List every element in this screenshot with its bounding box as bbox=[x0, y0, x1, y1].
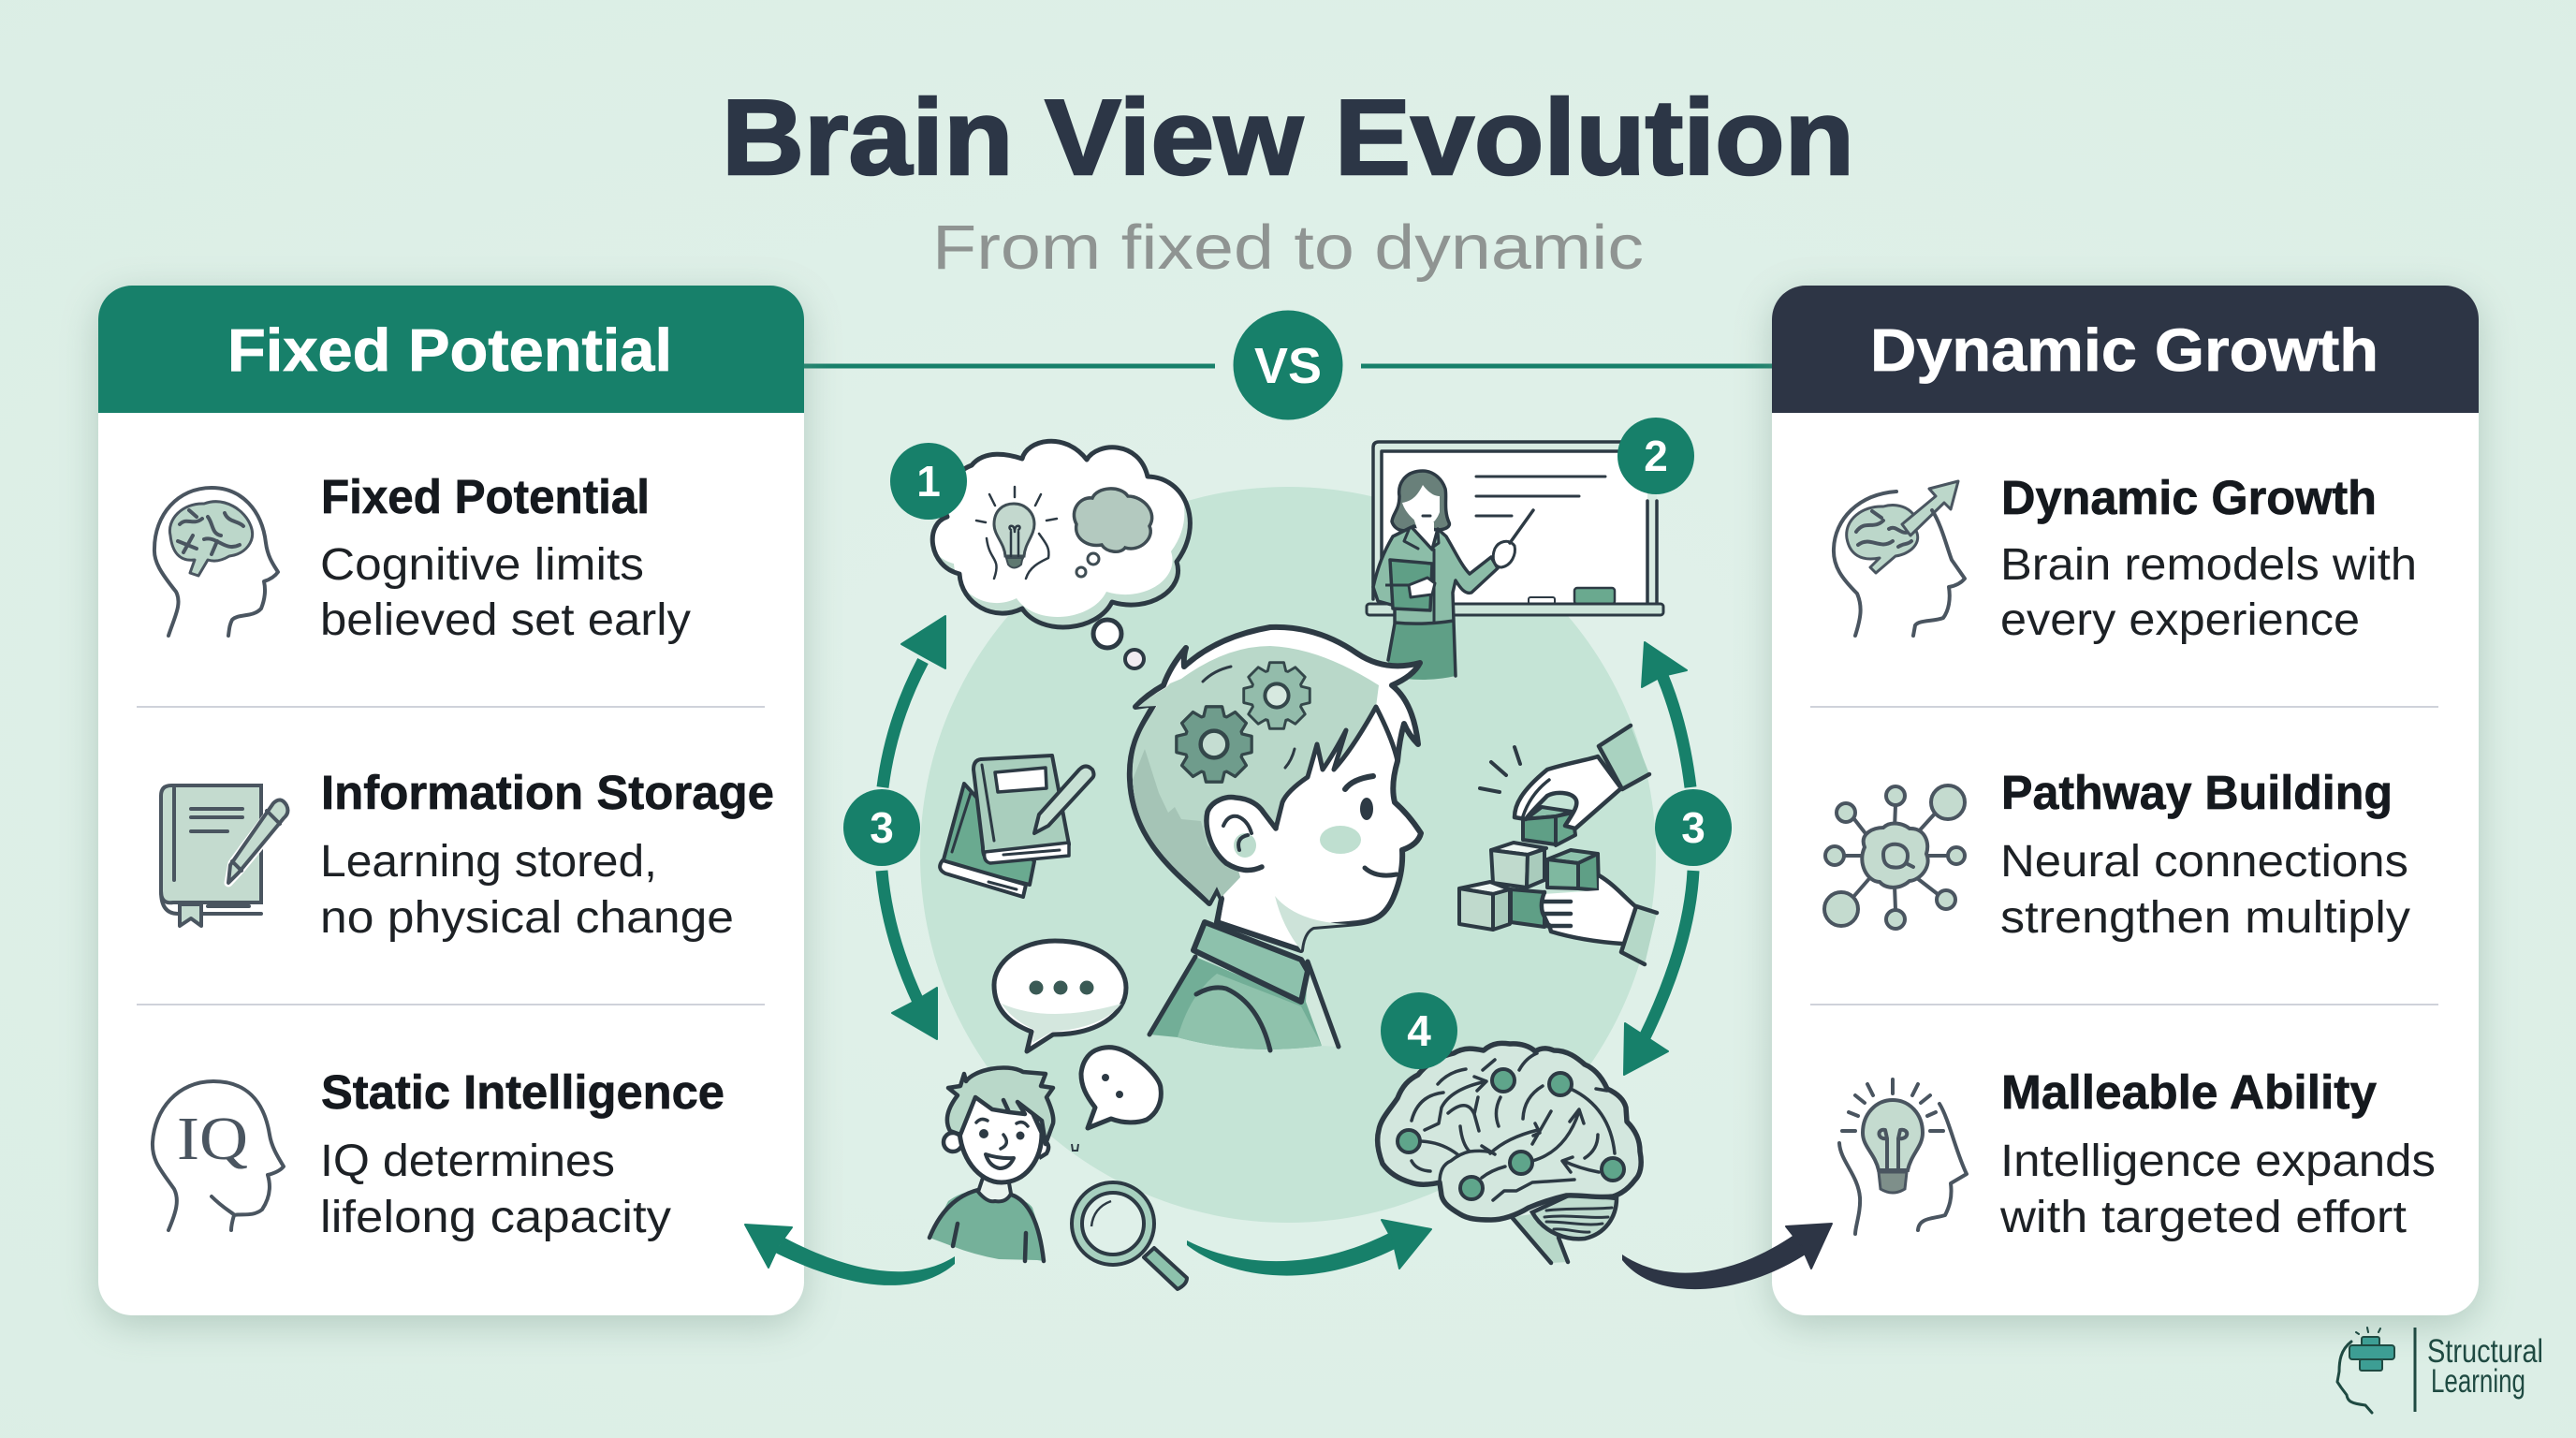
text: static intelligence: lifelong capacity bbox=[320, 1193, 671, 1242]
logo: Structural Learning bbox=[2337, 1328, 2543, 1413]
illustration: brain with pathways bbox=[1378, 1043, 1641, 1263]
icon: bulb in head bbox=[976, 487, 1057, 579]
arrow: to right panel bbox=[1622, 1224, 1832, 1289]
icon: book and pencil bbox=[161, 785, 288, 926]
text: dynamic growth bbox=[2000, 471, 2417, 645]
icon: head with IQ bbox=[153, 1081, 284, 1230]
icon: head with growing brain bbox=[1834, 481, 1965, 636]
text: malleable ability: Malleable Ability bbox=[2001, 1065, 2378, 1119]
text: static intelligence: Static Intelligence bbox=[321, 1065, 724, 1119]
text: information storage bbox=[320, 766, 774, 943]
illustration: boy with gears bbox=[1130, 627, 1421, 1050]
arrow: to left panel bbox=[745, 1225, 955, 1285]
badge 3 left: 3 bbox=[870, 803, 894, 852]
front notebook bbox=[973, 756, 1069, 863]
blocks bbox=[1459, 807, 1599, 930]
text: malleable ability: with targeted effort bbox=[1999, 1193, 2407, 1242]
gear small bbox=[1244, 663, 1310, 728]
panel header bbox=[98, 286, 804, 413]
neck shading bbox=[1275, 896, 1348, 950]
text: static intelligence: IQ determines bbox=[320, 1137, 615, 1186]
icon: neural network bbox=[1824, 785, 1965, 929]
panel: fixed potential bbox=[98, 286, 804, 1325]
text: pathway building bbox=[2000, 766, 2410, 943]
panel header bbox=[1772, 286, 2479, 413]
badge 2: 2 bbox=[1644, 432, 1668, 480]
text: fixed potential: Cognitive limits bbox=[320, 540, 644, 590]
panel: dynamic growth bbox=[1772, 286, 2479, 1325]
text: pathway building: Pathway Building bbox=[2001, 766, 2393, 819]
upper cuff bbox=[1598, 726, 1649, 789]
text: information storage: no physical change bbox=[320, 893, 734, 943]
pencil bbox=[1034, 766, 1093, 833]
subtitle: From fixed to dynamic bbox=[932, 213, 1644, 283]
icon: magnifying glass bbox=[1072, 1182, 1187, 1289]
badge 3 right bbox=[1655, 789, 1732, 866]
ear bbox=[1207, 798, 1276, 870]
brain outline bbox=[1378, 1043, 1641, 1220]
icon: head with light bulb bbox=[1839, 1079, 1967, 1234]
illustration: teacher at whiteboard bbox=[1367, 442, 1663, 680]
brain folds and pathways bbox=[1412, 1053, 1615, 1200]
text: pathway building: Neural connections bbox=[2000, 837, 2408, 887]
illustration: books and pencil bbox=[940, 756, 1093, 897]
VS connector bbox=[804, 311, 1772, 419]
badge 1 bbox=[890, 443, 967, 520]
hair shadow bbox=[1133, 749, 1240, 901]
badge 3 right: 3 bbox=[1681, 803, 1705, 852]
badge 4: 4 bbox=[1407, 1006, 1431, 1055]
lower hand bbox=[1543, 875, 1635, 944]
title: Brain View Evolution bbox=[722, 79, 1854, 198]
text: fixed potential bbox=[320, 470, 691, 645]
badge 2 bbox=[1617, 418, 1694, 494]
lower cuff bbox=[1621, 906, 1657, 964]
icon: head with IQ: IQ bbox=[177, 1105, 248, 1173]
upper hand bbox=[1515, 756, 1621, 829]
panel header: Dynamic Growth bbox=[1870, 316, 2378, 384]
arrow: right cycle up bbox=[1642, 642, 1690, 787]
text: dynamic growth: Brain remodels with bbox=[2000, 540, 2417, 590]
gear large bbox=[1177, 707, 1251, 782]
cerebellum bbox=[1532, 1194, 1617, 1239]
icon: head with brain bbox=[154, 488, 278, 636]
badge 1: 1 bbox=[916, 457, 941, 506]
teacher figure bbox=[1373, 471, 1533, 680]
arrow: right cycle down bbox=[1624, 871, 1693, 1075]
text: fixed potential: believed set early bbox=[320, 595, 691, 645]
logo: Structural Learning: Structural bbox=[2427, 1333, 2543, 1370]
thought bubbles bbox=[1093, 620, 1144, 668]
text: malleable ability bbox=[1999, 1065, 2436, 1242]
text: dynamic growth: every experience bbox=[2000, 595, 2360, 645]
logo: Structural Learning: Learning bbox=[2431, 1363, 2525, 1400]
central circle backdrop bbox=[920, 487, 1656, 1223]
text: dynamic growth: Dynamic Growth bbox=[2001, 471, 2377, 524]
spark lines bbox=[1480, 747, 1520, 792]
text: information storage: Information Storage bbox=[321, 766, 774, 819]
text: malleable ability: Intelligence expands bbox=[2000, 1137, 2436, 1186]
illustration: speech bubbles bbox=[994, 941, 1161, 1151]
badge 4 bbox=[1381, 992, 1457, 1069]
text: static intelligence bbox=[320, 1065, 724, 1242]
panel header: Fixed Potential bbox=[227, 316, 672, 384]
illustration: small boy bbox=[929, 1067, 1053, 1261]
illustration: blocks and hands bbox=[1459, 726, 1657, 964]
VS connector: VS bbox=[1254, 338, 1322, 394]
whiteboard bbox=[1367, 442, 1663, 615]
arrow: to brain bbox=[1187, 1220, 1431, 1276]
illustration: thought cloud bbox=[927, 431, 1190, 627]
pathway nodes bbox=[1398, 1069, 1624, 1199]
brain stem bbox=[1512, 1212, 1568, 1263]
text: pathway building: strengthen multiply bbox=[2000, 893, 2410, 943]
logo icon bbox=[2337, 1328, 2394, 1413]
back book bbox=[940, 784, 1034, 897]
icon: small cloud bbox=[1074, 489, 1152, 551]
face details bbox=[1320, 776, 1397, 875]
badge 3 left bbox=[843, 789, 920, 866]
boy head bbox=[1130, 627, 1421, 950]
shirt bbox=[1149, 922, 1339, 1050]
arrow: left cycle down bbox=[882, 871, 937, 1039]
boy hair bbox=[1133, 646, 1379, 901]
text: information storage: Learning stored, bbox=[320, 837, 657, 887]
text: fixed potential: Fixed Potential bbox=[321, 470, 650, 523]
arrow: left cycle up bbox=[883, 616, 945, 787]
